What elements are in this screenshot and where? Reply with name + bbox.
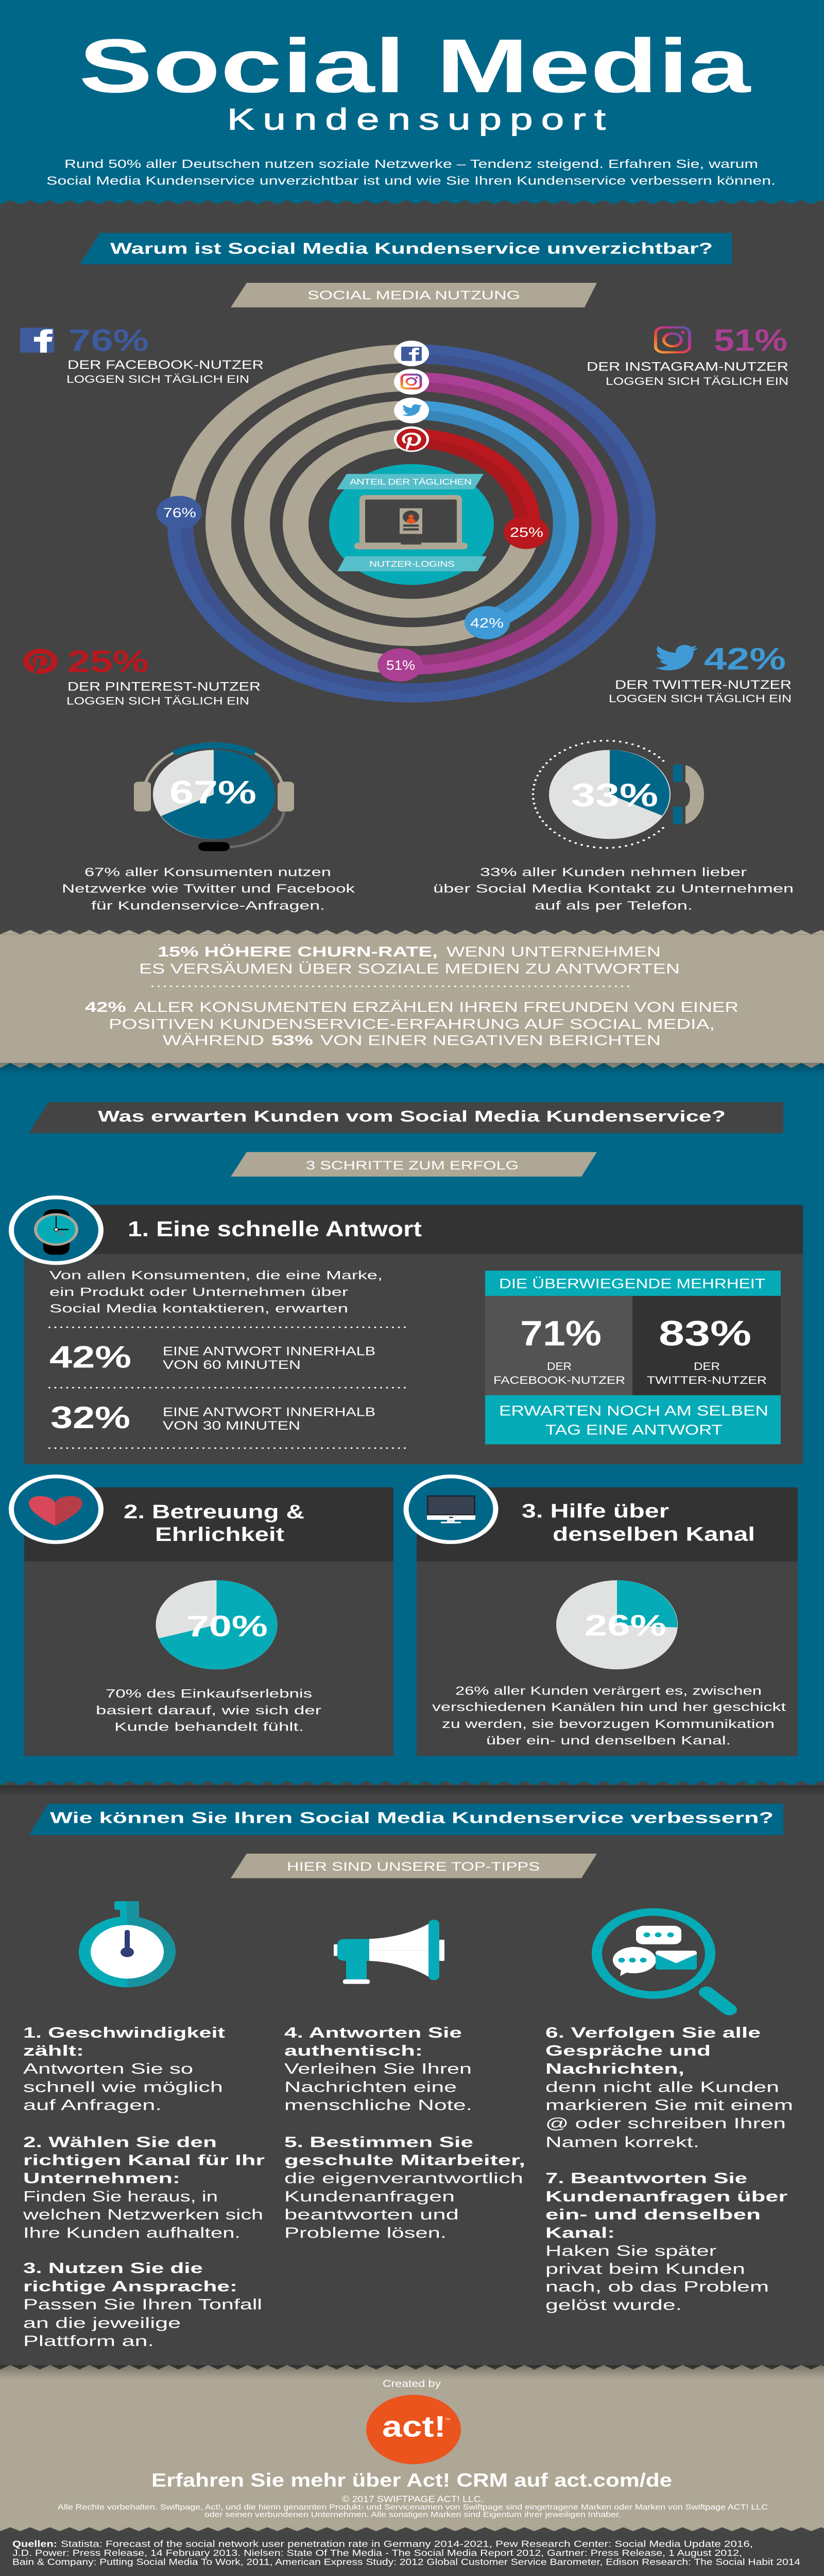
tip 4: Verleihen Sie Ihren (284, 2061, 472, 2077)
icon: instagram badge (394, 369, 429, 395)
caption: zu werden, sie bevorzugen Kommunikation (442, 1717, 775, 1731)
icon: magnifier with messages (597, 1912, 729, 2010)
icon: act logo (366, 2395, 461, 2464)
icon: pinterest badge (394, 426, 429, 452)
tip 6: markieren Sie mit einem (545, 2097, 793, 2113)
caption: 67%: Netzwerke wie Twitter und Facebook (62, 882, 355, 895)
tip 5: 5. Bestimmen Sie (284, 2134, 473, 2150)
stat: 32% (50, 1400, 375, 1435)
table: majority same-day: ERWARTEN NOCH AM SELBEN (499, 1403, 768, 1419)
pie chart: 26% (556, 1580, 678, 1669)
caption: 67%: 67% aller Konsumenten nutzen (84, 865, 331, 878)
tip 1: Antworten Sie so (23, 2061, 193, 2077)
stat: twitter 42%: LOGGEN SICH TÄGLICH EIN (609, 693, 792, 705)
panel: step 2 betreuung (11, 1477, 393, 1756)
sources (12, 2539, 800, 2567)
callout: churn rate: ES VERSÄUMEN ÜBER SOZIALE MEDIEN ZU ANTWORTEN (139, 961, 680, 977)
tip 1: 1. Geschwindigkeit (23, 2025, 225, 2041)
icon: megaphone (334, 1920, 444, 1984)
tip 7: Kanal: (545, 2225, 615, 2241)
stat: 32%: 32% (50, 1400, 130, 1435)
tip 4 (284, 2025, 472, 2113)
bubble: 76%: 76% (163, 505, 196, 520)
tip 3: richtige Ansprache: (23, 2278, 237, 2295)
table: majority same-day (485, 1270, 781, 1444)
tip 2 (23, 2134, 265, 2241)
tip 3: 3. Nutzen Sie die (23, 2260, 203, 2277)
banner: anteil der täglichen (337, 474, 484, 489)
tip 4: Nachrichten eine (284, 2079, 457, 2095)
icon: facebook badge (394, 341, 429, 366)
bubble: 42%: 42% (470, 616, 504, 631)
bubble: 51% (377, 648, 423, 682)
tip 7: Kundenanfragen über (545, 2189, 787, 2205)
tip 7: 7. Beantworten Sie (545, 2171, 747, 2187)
callout: churn rate: WENN UNTERNEHMEN (447, 944, 661, 960)
icon: heart (11, 1477, 101, 1542)
heading banner: warum (80, 233, 732, 264)
callout: word of mouth: POSITIVEN KUNDENSERVICE-ERFAHRUNG AUF SOCIAL MEDIA, (109, 1016, 715, 1032)
banner: nutzer-logins (337, 556, 487, 571)
intro text: Rund 50% aller Deutschen nutzen soziale Netzwerke – Tendenz steigend. Erfahren Sie, warum (64, 157, 758, 171)
tip 5: Probleme lösen. (284, 2225, 447, 2241)
tip 6 (545, 2025, 793, 2150)
caption: Kunde behandelt fühlt. (114, 1720, 304, 1734)
tip 5: die eigenverantwortlich (284, 2171, 523, 2187)
icon: instagram (656, 327, 690, 352)
title: Social Media (79, 23, 751, 109)
footer credit (58, 2378, 768, 2519)
tip 3: an die jeweilige (23, 2315, 181, 2331)
icon: act logo: act! (382, 2411, 446, 2443)
stat: pinterest 25%: DER PINTEREST-NUTZER (67, 680, 261, 693)
tip 2: 2. Wählen Sie den (23, 2134, 217, 2150)
caption: 33% (433, 865, 794, 912)
table: majority same-day: TAG EINE ANTWORT (545, 1422, 723, 1438)
sub banner: social media nutzung (231, 283, 597, 308)
caption: 33%: über Social Media Kontakt zu Unternehmen (433, 882, 794, 895)
header (46, 23, 776, 187)
stat: instagram 51%: LOGGEN SICH TÄGLICH EIN (606, 375, 788, 387)
icon: facebook (20, 328, 54, 353)
tip 1: auf Anfragen. (23, 2097, 162, 2113)
tips column 1 (23, 2025, 265, 2349)
stat: twitter 42%: 42% (704, 642, 786, 676)
intro text (49, 1268, 383, 1315)
stat: facebook 76%: 76% (68, 323, 149, 358)
tip 7: ein- und denselben (545, 2207, 761, 2223)
ring: facebook 76% (174, 349, 649, 698)
callout: word of mouth: WÄHREND (163, 1032, 264, 1048)
tip 5: beantworten und (284, 2207, 459, 2223)
heading banner: was erwarten kunden: Was erwarten Kunden vom Social Media Kundenservice? (98, 1107, 726, 1125)
stat: twitter 42% (609, 642, 792, 705)
heading banner: was erwarten kunden (29, 1102, 783, 1133)
tips column 3 (545, 2025, 793, 2313)
heading banner: wie können sie (29, 1804, 783, 1835)
stat: facebook 76% (20, 323, 264, 385)
sub banner: top-tipps (231, 1854, 597, 1878)
callout: word of mouth: 53% (271, 1032, 313, 1048)
caption: 70% des Einkaufserlebnis (106, 1687, 312, 1700)
table: majority same-day: TWITTER-NUTZER (647, 1375, 767, 1386)
tip 7 (545, 2171, 787, 2313)
icon: monitor (406, 1477, 495, 1542)
icon: stopwatch (79, 1901, 176, 1987)
tip 5 (284, 2134, 525, 2241)
table: majority same-day: DER (547, 1361, 572, 1372)
bubble: 51%: 51% (386, 658, 415, 673)
sources: Quellen: (12, 2539, 57, 2549)
tip 3: Plattform an. (23, 2333, 154, 2349)
tip 7: nach, ob das Problem (545, 2279, 769, 2295)
ring: pinterest 25% (289, 434, 534, 613)
headset pie chart: 67% (134, 743, 294, 851)
heading banner: warum: Warum ist Social Media Kundenservice unverzichtbar? (110, 240, 713, 257)
heading banner: wie können sie: Wie können Sie Ihren Social Media Kundenservice verbessern? (50, 1809, 774, 1826)
tip 2: Finden Sie heraus, in (23, 2189, 218, 2205)
step title: 3. Hilfe über (522, 1500, 669, 1522)
stat: facebook 76%: DER FACEBOOK-NUTZER (67, 358, 264, 372)
step title (522, 1500, 755, 1545)
tip 5: Kundenanfragen (284, 2189, 455, 2205)
step title: Ehrlichkeit (155, 1523, 284, 1545)
phone pie chart: 33% (533, 741, 704, 848)
phone pie chart: 33%: 33% (571, 777, 658, 813)
tip 5: geschulte Mitarbeiter, (284, 2152, 525, 2168)
stat: 42%: EINE ANTWORT INNERHALB (163, 1345, 375, 1358)
stat: 42% (49, 1340, 375, 1375)
tip 6: denn nicht alle Kunden (545, 2079, 779, 2095)
headset pie chart: 67%: 67% (169, 774, 256, 810)
tip 6: 6. Verfolgen Sie alle (545, 2025, 761, 2041)
pie chart: 26%: 26% (585, 1609, 666, 1642)
caption (432, 1684, 786, 1747)
table: majority same-day: 71% (520, 1314, 602, 1353)
sub banner: 3 schritte: 3 SCHRITTE ZUM ERFOLG (306, 1159, 519, 1173)
callout: churn rate (139, 944, 680, 977)
sub banner: top-tipps: HIER SIND UNSERE TOP-TIPPS (287, 1860, 540, 1874)
table: majority same-day: 83% (659, 1314, 751, 1353)
table: majority same-day: FACEBOOK-NUTZER (493, 1375, 625, 1386)
caption: 67%: für Kundenservice-Anfragen. (91, 899, 325, 912)
caption: 33%: auf als per Telefon. (535, 899, 693, 912)
sub banner: social media nutzung: SOCIAL MEDIA NUTZUNG (307, 289, 520, 302)
icon: act logo: TM (445, 2418, 450, 2421)
caption: 67% (62, 865, 355, 912)
tip 1 (23, 2025, 225, 2113)
stat: facebook 76%: LOGGEN SICH TÄGLICH EIN (66, 374, 249, 385)
step title: 1. Eine schnelle Antwort (128, 1217, 422, 1241)
pie chart: 70%: 70% (186, 1610, 268, 1642)
icon: twitter (655, 645, 698, 670)
tip 1: schnell wie möglich (23, 2079, 223, 2095)
caption: 26% aller Kunden verärgert es, zwischen (455, 1684, 762, 1697)
tips column 2 (284, 2025, 525, 2241)
tip 7: gelöst wurde. (545, 2297, 682, 2313)
center disc with laptop (329, 464, 494, 585)
copyright: Alle Rechte vorbehalten. Swiftpage, Act!, und die hierin genannten Produkt- und Servicenamen von Swiftpage sind eingetragene Marken oder Marken von Swiftpage ACT! LLC (58, 2503, 768, 2511)
intro text: Social Media Kundenservice unverzichtbar ist und wie Sie Ihren Kundenservice verbessern können. (46, 174, 776, 187)
caption (96, 1687, 321, 1734)
sub banner: 3 schritte (231, 1152, 597, 1177)
copyright (58, 2494, 768, 2519)
tip 2: Unternehmen: (23, 2171, 180, 2187)
caption: verschiedenen Kanälen hin und her geschickt (432, 1700, 786, 1714)
step title (124, 1501, 304, 1545)
bubble: 42% (465, 606, 510, 639)
stat: 32%: VON 30 MINUTEN (163, 1419, 300, 1433)
stat: pinterest 25%: 25% (67, 645, 149, 679)
tip 6: Namen korrekt. (545, 2134, 699, 2150)
tip 2: Ihre Kunden aufhalten. (23, 2225, 241, 2241)
stat: instagram 51%: 51% (714, 323, 787, 358)
callout: word of mouth: VON EINER NEGATIVEN BERICHTEN (320, 1032, 661, 1048)
table: majority same-day: DER (694, 1361, 720, 1372)
stat: pinterest 25% (23, 645, 261, 707)
ring: instagram 51% (212, 377, 611, 670)
intro text (46, 157, 776, 187)
subtitle: Kundensupport (227, 103, 606, 136)
icon: laptop (354, 495, 468, 549)
panel: step 3 hilfe (406, 1477, 798, 1756)
radial chart: daily logins (157, 341, 649, 698)
sources: J.D. Power: Press Release, 14 February 2013. Nielsen: State Of The Media - The Social Media Report 2012, Gartner: Press Release, 1 August 2012, (12, 2548, 742, 2558)
tip 4: 4. Antworten Sie (284, 2025, 462, 2041)
bubble: 25%: 25% (510, 525, 543, 540)
stat: twitter 42%: DER TWITTER-NUTZER (615, 678, 792, 692)
tip 2: welchen Netzwerken sich (23, 2207, 263, 2223)
table: majority same-day: DIE ÜBERWIEGENDE MEHRHEIT (499, 1276, 765, 1292)
intro text: Von allen Konsumenten, die eine Marke, (49, 1268, 383, 1282)
tip 1: zählt: (23, 2043, 84, 2059)
tip 4: authentisch: (284, 2043, 423, 2059)
copyright: oder seinen verbundenen Unternehmen. Alle sonstigen Marken sind Eigentum ihrer jeweiligen Inhaber. (204, 2511, 621, 2519)
copyright: © 2017 SWIFTPAGE ACT! LLC. (342, 2494, 484, 2504)
stat: instagram 51%: DER INSTAGRAM-NUTZER (587, 360, 788, 374)
bubble: 76% (157, 496, 202, 529)
callout: word of mouth (85, 999, 739, 1048)
stat: instagram 51% (587, 323, 788, 387)
stat: 42%: 42% (49, 1340, 131, 1375)
tip 3: Passen Sie Ihren Tonfall (23, 2296, 262, 2313)
banner: nutzer-logins: NUTZER-LOGINS (369, 560, 455, 568)
step title: 2. Betreuung & (124, 1501, 304, 1522)
icon: watch (11, 1197, 101, 1263)
tip 6: Gespräche und (545, 2043, 711, 2059)
footer credit: Created by (383, 2378, 441, 2389)
icon: twitter badge (394, 398, 429, 423)
callout: word of mouth: ALLER KONSUMENTEN ERZÄHLEN IHREN FREUNDEN VON EINER (134, 999, 739, 1015)
tip 3 (23, 2260, 262, 2349)
tip 4: menschliche Note. (284, 2097, 472, 2113)
ring: twitter 42% (250, 405, 573, 641)
tip 6: @ oder schreiben Ihren (545, 2115, 786, 2131)
tip 7: privat beim Kunden (545, 2261, 745, 2277)
step title: denselben Kanal (553, 1523, 755, 1545)
icon: pinterest (23, 649, 58, 674)
tip 7: Haken Sie später (545, 2243, 716, 2259)
intro text: ein Produkt oder Unternehmen über (49, 1285, 348, 1298)
caption: 33%: 33% aller Kunden nehmen lieber (480, 865, 747, 878)
call to action: Erfahren Sie mehr über Act! CRM auf act.com/de (151, 2470, 672, 2491)
callout: churn rate: 15% HÖHERE CHURN-RATE, (158, 944, 438, 960)
sources: Statista: Forecast of the social network user penetration rate in Germany 2014-2021, Pew Research Center: Social Media Update 2016, (61, 2539, 753, 2549)
panel: step 1 schnelle antwort (11, 1197, 803, 1464)
bubble: 25% (504, 516, 549, 549)
caption: basiert darauf, wie sich der (96, 1704, 321, 1717)
stat: 32%: EINE ANTWORT INNERHALB (163, 1405, 375, 1419)
stat: 42%: VON 60 MINUTEN (163, 1358, 301, 1372)
stat: pinterest 25%: LOGGEN SICH TÄGLICH EIN (66, 695, 249, 707)
intro text: Social Media kontaktieren, erwarten (49, 1302, 348, 1315)
tip 6: Nachrichten, (545, 2061, 684, 2077)
banner: anteil der täglichen: ANTEIL DER TÄGLICHEN (350, 477, 472, 486)
tip 2: richtigen Kanal für Ihr (23, 2152, 265, 2168)
pie chart: 70% (156, 1580, 277, 1669)
callout: word of mouth: 42% (85, 999, 126, 1015)
caption: über ein- und denselben Kanal. (486, 1734, 731, 1747)
ring backgrounds (180, 354, 643, 693)
